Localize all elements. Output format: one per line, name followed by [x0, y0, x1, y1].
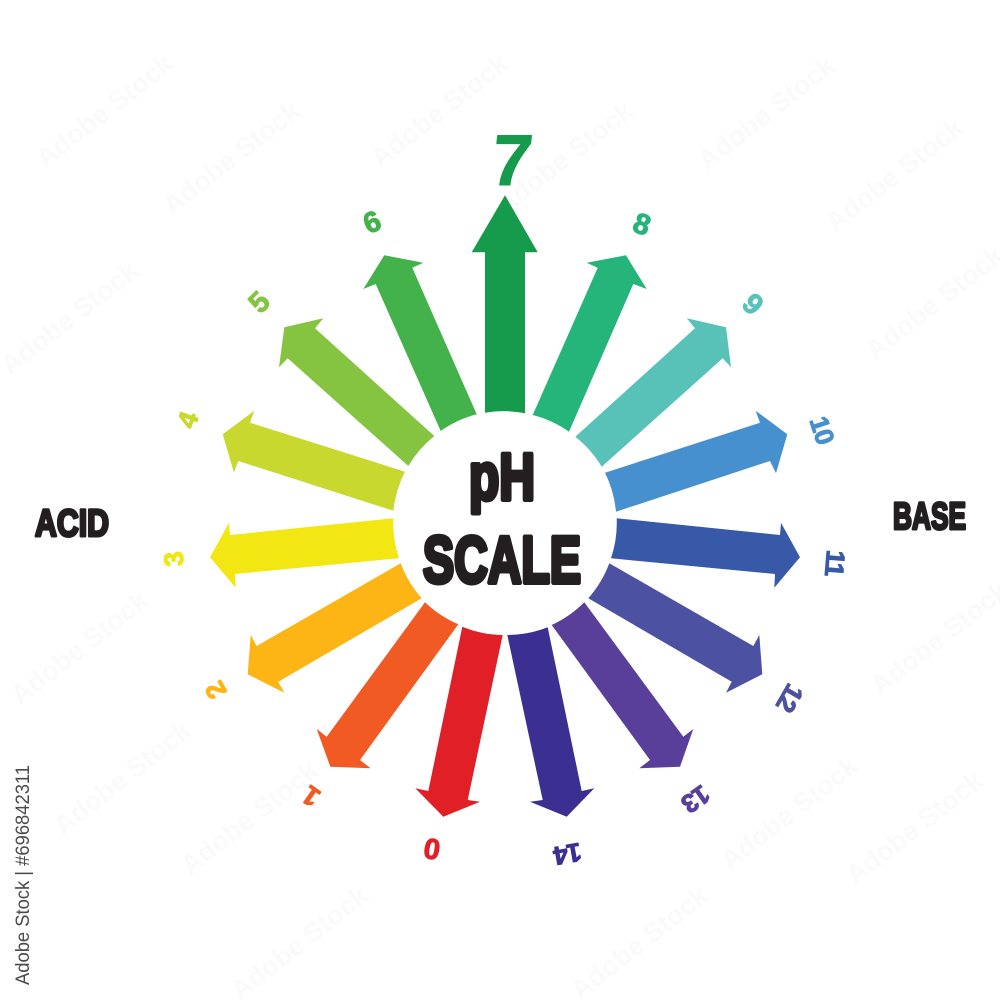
arrow: pH 6 [363, 255, 477, 431]
watermark pattern: Adobe Stock [692, 50, 841, 176]
number 5: 5 [243, 286, 277, 320]
number 11: 11 [819, 549, 851, 578]
stock id: Adobe Stock | #696842311 [13, 765, 34, 985]
watermark pattern: Adobe Stock [5, 585, 154, 711]
arrow: pH 3 [210, 518, 399, 588]
number 4: 4 [171, 408, 205, 432]
arrow: pH 2 [248, 563, 422, 693]
heading: pH: pH [469, 440, 535, 514]
watermark pattern: Adobe Stock [820, 112, 969, 238]
number 7: 7 [488, 121, 536, 201]
number 9: 9 [735, 288, 769, 322]
arrow: pH 8 [533, 255, 647, 432]
number 2: 2 [199, 676, 233, 704]
label: ACID: ACID [35, 503, 109, 545]
watermark pattern: Adobe Stock [840, 765, 989, 891]
number 13: 13 [676, 779, 716, 819]
arrow: pH 10 [605, 411, 787, 512]
number 8: 8 [629, 207, 655, 243]
arrow: pH 1 [317, 602, 458, 768]
arrow: pH 0 [415, 627, 503, 817]
label: BASE: BASE [893, 496, 966, 538]
number 3: 3 [158, 550, 190, 568]
number 12: 12 [770, 679, 810, 718]
arrow: pH 11 [611, 518, 800, 588]
watermark pattern: Adobe Stock [30, 48, 179, 174]
arrow: pH 7 [472, 195, 538, 413]
number 1: 1 [296, 779, 326, 813]
watermark pattern: Adobe Stock [175, 755, 324, 881]
number 14: 14 [551, 837, 584, 871]
number 10: 10 [804, 413, 841, 448]
arrow: pH 4 [223, 411, 405, 511]
arrow: pH 13 [552, 602, 693, 768]
watermark pattern: Adobe Stock [157, 95, 306, 221]
arrow: pH 9 [575, 318, 731, 467]
watermark pattern: Adobe Stock [490, 95, 639, 221]
arrow: pH 5 [279, 318, 434, 466]
number 6: 6 [359, 205, 386, 241]
arrow: pH 14 [507, 627, 594, 817]
watermark pattern: Adobe Stock [365, 48, 514, 174]
watermark pattern: Adobe Stock [715, 750, 864, 876]
number 0: 0 [421, 831, 443, 865]
heading: SCALE: SCALE [423, 522, 581, 596]
watermark pattern: Adobe Stock [48, 715, 197, 841]
arrow: pH 12 [588, 563, 762, 693]
